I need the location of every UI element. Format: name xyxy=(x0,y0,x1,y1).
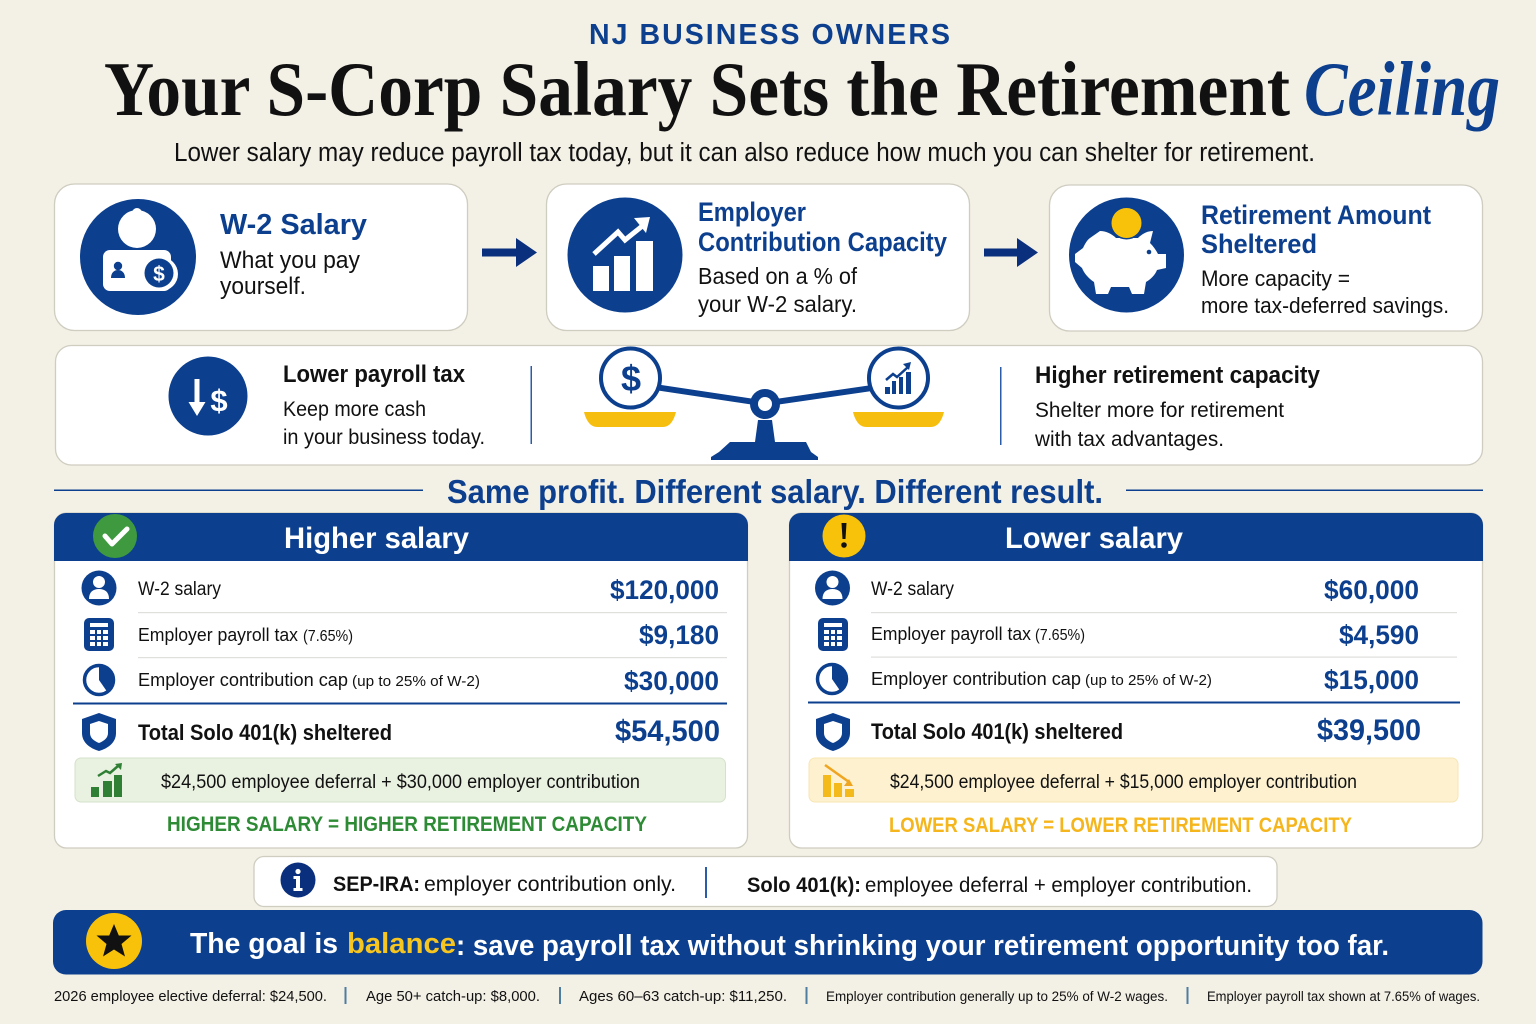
title: Your S-Corp Salary Sets the Retirement xyxy=(104,46,1290,132)
description: More capacity = xyxy=(1201,266,1350,291)
row: employer contribution cap: $30,000 xyxy=(624,666,719,696)
row: employer payroll tax: $9,180 xyxy=(639,620,719,650)
subtitle: Lower salary may reduce payroll tax today, but it can also reduce how much you can shelter for retirement. xyxy=(174,139,1315,167)
conclusion: LOWER SALARY = LOWER RETIREMENT CAPACITY xyxy=(889,814,1352,837)
row: employer payroll tax: Employer payroll tax xyxy=(138,624,299,645)
arrow xyxy=(984,238,1038,267)
panel: W-2 salary xyxy=(54,184,468,330)
icon: check xyxy=(93,514,137,558)
row: total sheltered: $39,500 xyxy=(1317,714,1421,747)
text: Solo 401(k): employee deferral + employer contribution. xyxy=(865,873,1252,897)
row: employer payroll tax xyxy=(138,620,719,650)
panel: tradeoff balance xyxy=(56,346,1482,465)
header bar xyxy=(789,513,1483,561)
icon: pie chart xyxy=(84,664,115,694)
row: employer payroll tax: Employer payroll tax xyxy=(871,623,1032,644)
row: employer contribution cap xyxy=(138,666,719,696)
heading: Retirement Amount xyxy=(1201,200,1431,230)
text: lower payroll tax xyxy=(283,361,485,449)
panel: plan note xyxy=(254,856,1277,906)
description: your W-2 salary. xyxy=(698,291,857,317)
description: yourself. xyxy=(220,273,306,300)
footnotes: Ages 60–63 catch-up: $11,250. xyxy=(579,989,787,1005)
icon: person xyxy=(82,570,116,606)
heading xyxy=(698,197,947,257)
icon: piggy bank with coin xyxy=(1069,198,1184,312)
heading: Employer xyxy=(698,197,806,227)
description: more tax-deferred savings. xyxy=(1201,293,1449,318)
description xyxy=(220,247,360,300)
row: employer contribution cap: Employer contribution cap xyxy=(138,669,348,690)
icon: info xyxy=(280,862,316,898)
text: higher retirement capacity xyxy=(1034,362,1321,451)
row: W-2 salary: W-2 salary xyxy=(871,579,954,600)
footnotes xyxy=(54,987,1480,1005)
icon: tax down xyxy=(168,356,248,436)
heading: Contribution Capacity xyxy=(698,227,947,257)
icon: salary person and money xyxy=(80,199,196,315)
title: Ceiling xyxy=(1304,46,1500,132)
row: W-2 salary: $60,000 xyxy=(1324,575,1419,605)
callout: contribution breakdown xyxy=(75,758,726,802)
footnotes: Employer contribution generally up to 25% of W-2 wages. xyxy=(826,989,1168,1004)
icon: warning xyxy=(822,514,866,558)
heading xyxy=(1201,200,1431,259)
panel: employer contribution capacity xyxy=(546,184,970,330)
row: employer contribution cap xyxy=(871,665,1419,695)
icon: balance scale: $ xyxy=(621,358,641,399)
text: lower payroll tax: Lower payroll tax xyxy=(283,361,466,388)
row: employer payroll tax xyxy=(871,620,1419,650)
panel: higher salary xyxy=(54,513,748,848)
callout: contribution breakdown: $24,500 employee deferral + $30,000 employer contribution xyxy=(161,771,640,793)
row: total sheltered xyxy=(138,715,720,748)
row: employer contribution cap: Employer contribution cap xyxy=(871,668,1081,689)
row: employer contribution cap: $15,000 xyxy=(1324,665,1419,695)
text: higher retirement capacity: Shelter more for retirement xyxy=(1035,398,1284,422)
row: W-2 salary: $120,000 xyxy=(610,575,719,605)
row: total sheltered: $54,500 xyxy=(615,715,720,748)
icon: rising bar chart xyxy=(568,198,682,312)
text: SEP-IRA: employer contribution only. xyxy=(424,872,676,896)
callout: contribution breakdown xyxy=(809,758,1458,802)
eyebrow heading: NJ BUSINESS OWNERS xyxy=(589,19,950,51)
text: Solo 401(k): Solo 401(k): xyxy=(747,873,861,897)
description xyxy=(1201,266,1449,318)
icon: shield xyxy=(82,713,116,751)
callout: contribution breakdown: $24,500 employee deferral + $15,000 employer contribution xyxy=(890,771,1357,793)
banner text: The goal is xyxy=(190,928,338,960)
text: SEP-IRA: SEP-IRA: xyxy=(333,872,420,896)
icon: declining bars xyxy=(823,765,854,797)
row: employer payroll tax: (7.65%) xyxy=(1035,627,1085,644)
text: higher retirement capacity: with tax advantages. xyxy=(1034,427,1224,451)
icon: balance scale xyxy=(584,348,944,460)
icon: tax down: $ xyxy=(210,383,228,418)
icon: shield xyxy=(816,713,850,751)
header bar xyxy=(54,513,748,561)
icon: person xyxy=(815,570,850,606)
icon: calculator xyxy=(84,618,114,651)
banner text: : save payroll tax without shrinking your retirement opportunity too far. xyxy=(456,930,1389,962)
footnotes: Employer payroll tax shown at 7.65% of wages. xyxy=(1207,989,1480,1004)
icon: star xyxy=(86,913,142,969)
row: total sheltered: Total Solo 401(k) sheltered xyxy=(871,719,1123,744)
section heading: Same profit. Different salary. Different result. xyxy=(447,473,1103,510)
icon: pie chart xyxy=(818,663,848,694)
panel heading: Higher salary xyxy=(284,522,469,555)
banner: the goal xyxy=(53,910,1482,974)
description: Based on a % of xyxy=(698,263,857,289)
row: employer payroll tax: $4,590 xyxy=(1339,620,1419,650)
row: W-2 salary: W-2 salary xyxy=(138,579,221,600)
row: total sheltered: Total Solo 401(k) sheltered xyxy=(138,720,392,745)
text: higher retirement capacity: Higher retirement capacity xyxy=(1035,362,1321,389)
panel: lower salary xyxy=(789,513,1483,848)
row: total sheltered xyxy=(871,714,1421,747)
description: What you pay xyxy=(220,247,360,274)
row: W-2 salary xyxy=(871,575,1419,605)
footnotes: 2026 employee elective deferral: $24,500. xyxy=(54,989,327,1005)
row: employer payroll tax: (7.65%) xyxy=(303,628,353,645)
text: lower payroll tax: in your business today. xyxy=(283,425,485,449)
icon: calculator xyxy=(818,618,848,651)
heading: W-2 Salary xyxy=(220,209,367,241)
row: W-2 salary xyxy=(138,575,719,605)
panel heading: Lower salary xyxy=(1005,522,1183,555)
row: employer contribution cap: (up to 25% of W-2) xyxy=(1085,672,1212,689)
icon: salary person and money: $ xyxy=(153,263,165,286)
heading: Sheltered xyxy=(1201,229,1317,259)
arrow xyxy=(482,238,537,267)
conclusion: HIGHER SALARY = HIGHER RETIREMENT CAPACITY xyxy=(167,813,647,836)
panel: retirement amount sheltered xyxy=(1050,185,1482,331)
footnotes: Age 50+ catch-up: $8,000. xyxy=(366,989,540,1005)
row: employer contribution cap: (up to 25% of W-2) xyxy=(352,673,480,690)
banner text: balance xyxy=(347,928,456,960)
description xyxy=(698,263,857,317)
text: lower payroll tax: Keep more cash xyxy=(283,397,426,421)
icon: green growth xyxy=(91,763,122,797)
